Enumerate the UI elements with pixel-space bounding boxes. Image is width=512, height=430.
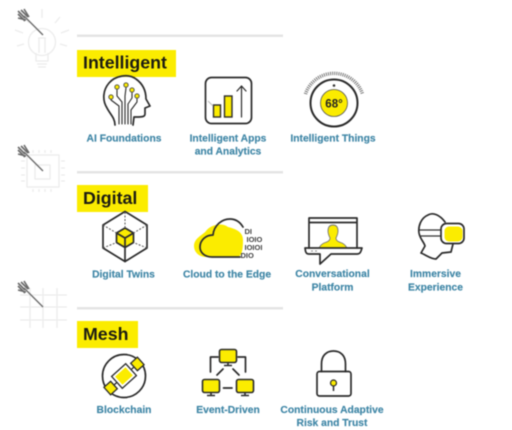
heading: Mesh: [77, 321, 138, 348]
panel: Mesh: [18, 281, 384, 429]
icon: chip with arrow: [18, 145, 65, 192]
divider: [77, 171, 283, 174]
icon: cloud with data: DI: [244, 227, 252, 236]
label: Cloud to the Edge: Cloud to the Edge: [183, 270, 271, 280]
heading: Digital: Digital: [83, 188, 137, 208]
icon: cube: [103, 212, 147, 262]
icon: thermostat: [306, 73, 362, 126]
label: Immersive Experience: Immersive: [410, 269, 461, 280]
icon: cloud with data: IOIOI: [244, 243, 262, 252]
icon: thermostat: 68°: [325, 98, 343, 110]
icon: cloud with data: [194, 219, 263, 260]
label: Intelligent Apps and Analytics: and Analytics: [195, 146, 262, 158]
label: Continuous Adaptive Risk and Trust: Risk and Trust: [297, 418, 368, 429]
label: AI Foundations: AI Foundations: [87, 134, 162, 144]
icon: cloud with data: IOIO: [246, 235, 263, 244]
icon: bar chart: [206, 78, 252, 124]
icon: blockchain: [102, 354, 146, 398]
icon: VR headset: [419, 214, 464, 259]
divider: [77, 34, 283, 37]
icon: cloud with data: DIO: [240, 251, 254, 260]
label: Digital Twins: Digital Twins: [92, 270, 155, 280]
label: Continuous Adaptive Risk and Trust: Continuous Adaptive: [280, 405, 384, 416]
label: Intelligent Things: Intelligent Things: [290, 134, 376, 144]
icon: AI head: [104, 76, 150, 125]
icon: padlock: [317, 351, 351, 396]
heading: Digital: [77, 185, 148, 212]
label: Conversational Platform: Conversational: [295, 269, 370, 280]
panel: Intelligent: [15, 9, 376, 158]
heading: Mesh: Mesh: [83, 324, 128, 344]
icon: network monitors: [202, 350, 254, 396]
label: Conversational Platform: Platform: [312, 282, 353, 294]
divider: [77, 307, 283, 310]
label: Intelligent Apps and Analytics: Intelligent Apps: [190, 134, 267, 144]
icon: light bulb with arrow: [15, 9, 69, 67]
icon: chat screen: [305, 218, 362, 264]
icon: mesh grid with arrow: [18, 281, 67, 328]
heading: Intelligent: [77, 50, 176, 77]
label: Event-Driven: Event-Driven: [196, 405, 260, 416]
heading: Intelligent: Intelligent: [83, 52, 167, 72]
label: Immersive Experience: Experience: [408, 282, 463, 294]
panel: Digital: [18, 145, 464, 294]
label: Blockchain: Blockchain: [97, 405, 151, 416]
